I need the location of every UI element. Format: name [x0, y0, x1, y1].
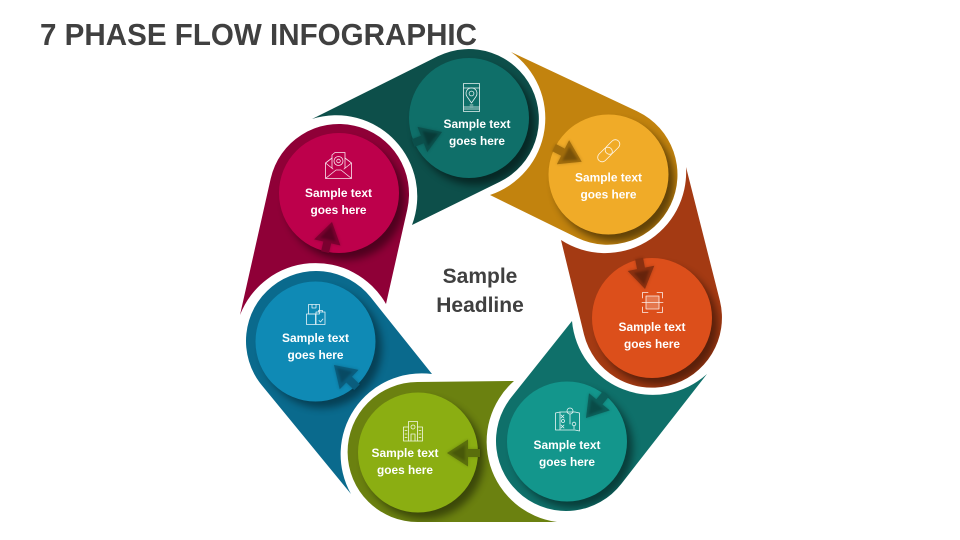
label: goes here: [539, 455, 595, 469]
label: goes here: [624, 337, 680, 351]
icon: strategy map: [556, 408, 580, 431]
icon: scan frame: [642, 292, 663, 312]
label: goes here: [449, 134, 505, 148]
icon: building: [404, 422, 422, 441]
arrow: blue: [325, 355, 366, 397]
icon: envelope: [326, 152, 352, 178]
label: [372, 446, 438, 477]
label: [575, 170, 642, 202]
arrow: yellow: [548, 136, 588, 174]
label: Sample text: [282, 331, 349, 345]
icon: phone location: [464, 84, 480, 112]
phase: blue: [246, 271, 432, 494]
label: Sample text: [444, 117, 510, 131]
label: [618, 320, 686, 351]
phase: orange: [561, 167, 722, 388]
infographic canvas: [41, 24, 722, 522]
arrow: crimson: [312, 219, 345, 255]
label: Sample text: [618, 320, 686, 334]
arrow: teal: [576, 386, 616, 427]
label: [305, 186, 372, 217]
label: Sample text: [575, 170, 642, 184]
title: 7 PHASE FLOW INFOGRAPHIC: [40, 17, 477, 52]
center headline: [436, 265, 524, 317]
label: Sample text: [305, 186, 372, 200]
phase: dark teal: [312, 49, 539, 225]
phase: yellow: [490, 52, 677, 245]
label: [534, 438, 600, 469]
label: goes here: [580, 188, 637, 202]
center headline: Headline: [436, 294, 524, 317]
label: Sample text: [372, 446, 438, 460]
phase: green: [348, 381, 557, 522]
label: Sample text: [534, 438, 600, 452]
arrow: dark teal: [408, 119, 447, 156]
icon: chain link: [596, 138, 622, 164]
center headline: Sample: [443, 265, 517, 288]
label: [282, 331, 349, 362]
label: goes here: [377, 463, 433, 477]
phase: crimson: [240, 124, 409, 315]
label: goes here: [310, 203, 367, 217]
arrow: orange: [626, 256, 658, 292]
arrow: green: [447, 440, 480, 466]
label: goes here: [288, 348, 344, 362]
phase: teal: [496, 321, 707, 511]
icon: boxes and clipboard: [306, 304, 325, 324]
label: [444, 117, 510, 148]
